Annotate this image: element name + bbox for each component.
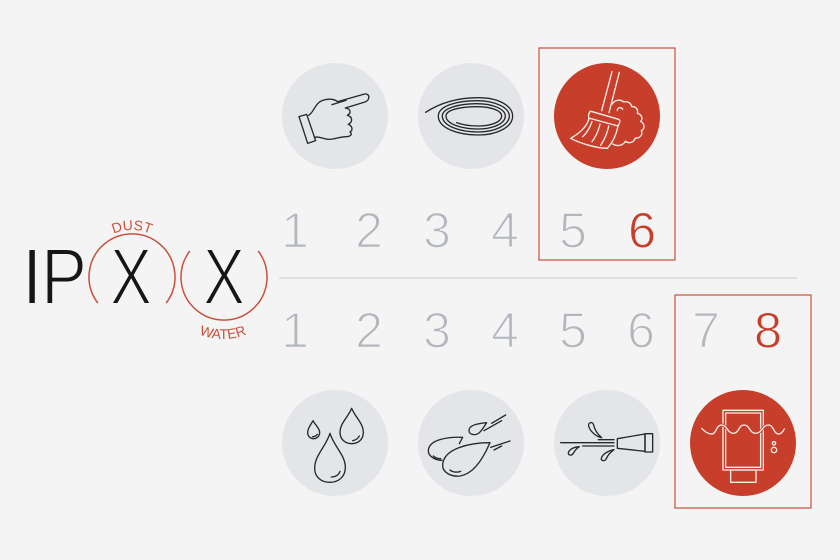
dust arc (89, 234, 175, 303)
water scale numbers: 4 (491, 302, 519, 358)
icon: broom and dust (554, 63, 660, 169)
water scale numbers: 6 (627, 302, 655, 358)
letters IP: P (41, 232, 87, 321)
icon: submerged device (690, 390, 796, 496)
dust scale numbers: 6 (628, 202, 656, 258)
water scale numbers: 2 (355, 302, 383, 358)
water arc (181, 251, 267, 320)
water scale numbers: 3 (423, 302, 451, 358)
water scale numbers: 1 (281, 302, 309, 358)
letters IP (21, 232, 87, 321)
dust scale numbers: 4 (491, 202, 519, 258)
icon: driving rain (418, 390, 524, 496)
icon: dripping drops (282, 390, 388, 496)
first X: X (110, 232, 152, 321)
highlight box: water level 8 (675, 295, 811, 508)
water scale numbers: 7 (692, 302, 720, 358)
dust scale numbers: 3 (423, 202, 451, 258)
dust scale numbers (281, 202, 656, 258)
label: DUST: DUST (112, 220, 154, 234)
water scale numbers: 5 (559, 302, 587, 358)
dust scale numbers: 5 (559, 202, 587, 258)
second X: X (203, 232, 245, 321)
water scale numbers (281, 302, 782, 358)
letters IP: I (21, 232, 43, 321)
dust scale numbers: 2 (355, 202, 383, 258)
label: WATER: WATER (202, 325, 246, 340)
highlight box: dust level 6 (539, 48, 675, 260)
water scale numbers: 8 (754, 302, 782, 358)
icon: coil (418, 63, 524, 169)
icon: water jet nozzle (554, 390, 660, 496)
IPXX logo (21, 220, 268, 340)
dust scale numbers: 1 (281, 202, 309, 258)
icon: pointing hand (282, 63, 388, 169)
